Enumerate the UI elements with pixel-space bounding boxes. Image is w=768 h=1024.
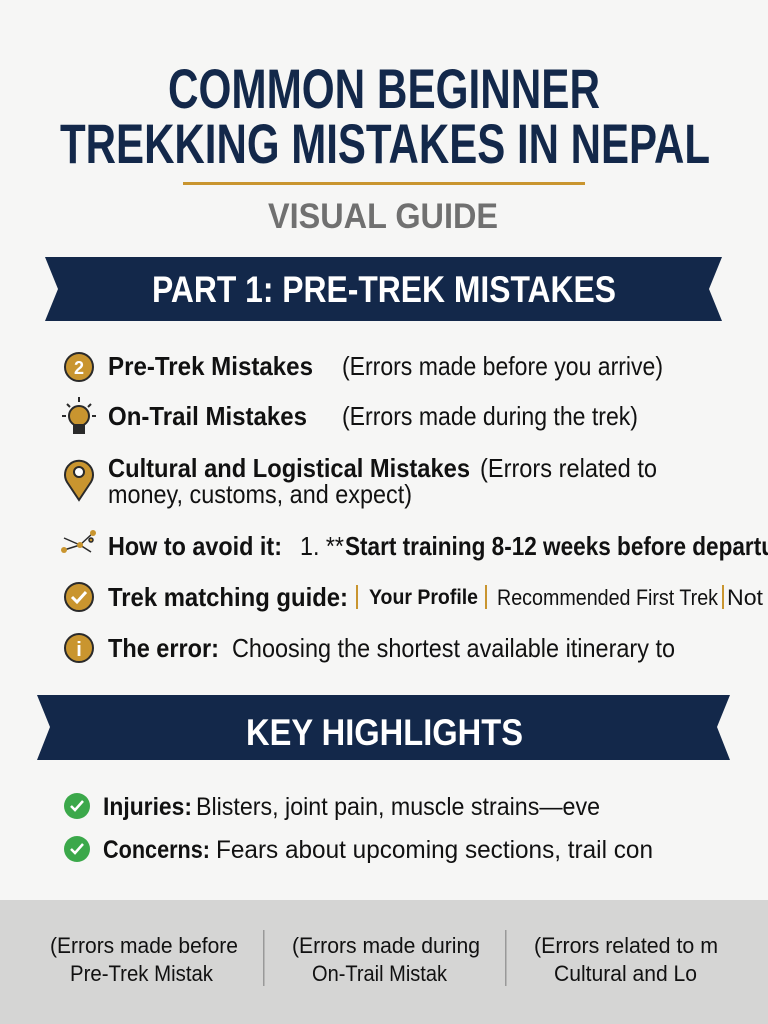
item: the error: The error: (108, 633, 219, 663)
banner: part 1: PART 1: PRE-TREK MISTAKES (152, 269, 616, 310)
item: trek matching: Trek matching guide: (108, 582, 348, 612)
item: trek matching (108, 582, 763, 612)
icon: number 2: 2 (74, 358, 84, 378)
item: the error: Choosing the shortest available itinerary to (232, 633, 675, 663)
highlight: injuries: Injuries: (103, 793, 192, 821)
footer col 3 (534, 933, 718, 986)
footer col 2: (Errors made during (292, 933, 480, 958)
icon: info (65, 634, 93, 662)
highlight: concerns: Fears about upcoming sections, trail con (216, 836, 653, 864)
item: cultural: (Errors related to (480, 453, 657, 483)
subtitle: VISUAL GUIDE (268, 197, 498, 236)
item: trek matching: Recommended First Trek (497, 585, 719, 610)
footer col 1 (50, 933, 238, 986)
footer col 2: On-Trail Mistak (312, 961, 448, 986)
item: cultural: Cultural and Logistical Mistakes (108, 453, 470, 483)
highlight: concerns: Concerns: (103, 836, 210, 864)
footer col 3: Cultural and Lo (554, 961, 697, 986)
icon: number 2 (65, 353, 93, 381)
icon: light bulb (62, 397, 96, 434)
banner: part 1 (45, 257, 722, 321)
item: cultural: money, customs, and expect) (108, 479, 412, 509)
footer band (0, 900, 768, 1024)
title: COMMON BEGINNER (168, 57, 600, 120)
item: pre-trek: Pre-Trek Mistakes (108, 351, 313, 381)
footer col 3: (Errors related to m (534, 933, 718, 958)
title (60, 57, 710, 175)
item: trek matching: Not (727, 585, 763, 610)
item: how to avoid: 1. ** (300, 531, 344, 561)
item: pre-trek: (Errors made before you arrive) (342, 351, 663, 381)
banner: key highlights (37, 695, 730, 760)
footer col 2 (292, 933, 480, 986)
banner: key highlights: KEY HIGHLIGHTS (246, 712, 523, 753)
item: cultural (108, 453, 657, 509)
item: how to avoid: How to avoid it: (108, 531, 282, 561)
item: on-trail: (Errors made during the trek) (342, 401, 638, 431)
item: trek matching: Your Profile (369, 586, 478, 609)
highlight: injuries: Blisters, joint pain, muscle strains—eve (196, 793, 600, 821)
item: how to avoid (108, 531, 768, 561)
footer col 1: Pre-Trek Mistak (70, 961, 214, 986)
footer col 1: (Errors made before (50, 933, 238, 958)
item: pre-trek (108, 351, 663, 381)
icon: map pin (65, 461, 93, 500)
item: on-trail: On-Trail Mistakes (108, 401, 307, 431)
icon: network (61, 530, 96, 553)
item: on-trail (108, 401, 638, 431)
list: highlights (64, 793, 653, 864)
icon: info: i (76, 639, 82, 661)
icon: check (65, 583, 93, 611)
list: mistake categories (61, 351, 768, 663)
